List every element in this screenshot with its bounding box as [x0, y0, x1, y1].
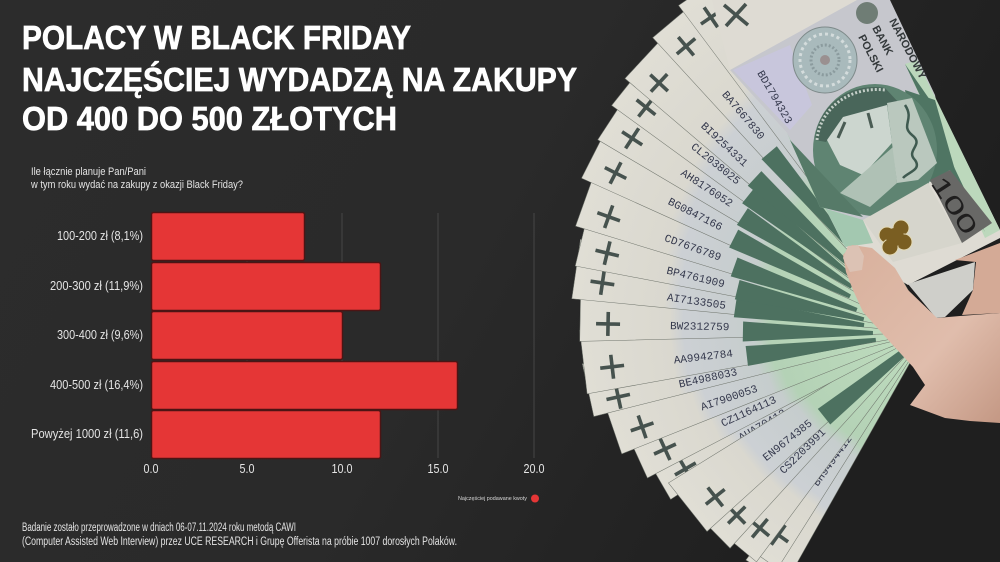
- banknote fan: BI9254331: [698, 121, 750, 170]
- lower green field: [787, 133, 873, 247]
- gold hologram: [879, 220, 912, 255]
- upper finger: [955, 243, 1000, 315]
- bank name: BANK: [869, 24, 895, 58]
- axis labels: 20.0: [524, 462, 545, 476]
- bars: [152, 212, 458, 458]
- survey question: Ile łącznie planuje Pan/Pani: [31, 166, 146, 178]
- title: [22, 19, 577, 137]
- bank name: NARODOWY: [886, 17, 929, 82]
- banknote fan: AH8176052: [678, 168, 734, 210]
- source note: [22, 522, 457, 548]
- banknote fan: BG0847166: [665, 197, 724, 234]
- category labels: 200-300 zł (11,9%): [50, 279, 143, 293]
- shoulder: [790, 140, 863, 217]
- banknote fan: CL2038025: [688, 142, 742, 188]
- banknote fan: CS2203991: [778, 427, 829, 477]
- palm and fingers: [843, 245, 1000, 423]
- serial number: BD1794323: [754, 69, 794, 126]
- periwinkle ornament: [733, 45, 812, 130]
- fingernail: [843, 245, 864, 272]
- source note: (Computer Assisted Web Interview) przez UCE RESEARCH i Grupę Offerista na próbie 1007 dorosłych Polaków.: [22, 536, 457, 548]
- banknote fan: AI7900053: [699, 384, 760, 414]
- ornament field: [730, 0, 950, 247]
- dark green field: [905, 64, 985, 232]
- crown: [887, 98, 937, 183]
- survey question: w tym roku wydać na zakupy z okazji Black Friday?: [30, 179, 243, 191]
- banknote fan: [572, 0, 1000, 562]
- legend ring: [817, 90, 885, 140]
- bank name: POLSKI: [855, 33, 885, 75]
- watermark panel: [863, 183, 962, 262]
- bank name: [855, 17, 929, 82]
- axis labels: [144, 462, 545, 476]
- eagle emblem: [856, 2, 878, 24]
- axis labels: 10.0: [332, 462, 353, 476]
- banknote fan: CD7676789: [662, 233, 722, 265]
- banknote fan: AUA70412: [737, 408, 789, 445]
- banknote fan: BP4761909: [665, 266, 726, 291]
- stack of banknotes in hand: [908, 262, 975, 318]
- face: [827, 105, 892, 175]
- banknote fan: BH9494412: [811, 434, 855, 489]
- rosette: [793, 27, 857, 93]
- axis labels: 5.0: [240, 462, 255, 476]
- denomination band: [930, 170, 992, 243]
- title: NAJCZĘŚCIEJ WYDADZĄ NA ZAKUPY: [22, 61, 577, 98]
- category labels: [31, 229, 143, 441]
- title: OD 400 DO 500 ZŁOTYCH: [22, 100, 397, 137]
- category labels: Powyżej 1000 zł (11,6): [31, 427, 143, 441]
- legend: Najczęściej podawane kwoty: [458, 496, 527, 502]
- survey question: [30, 166, 243, 191]
- axis labels: 0.0: [144, 462, 159, 476]
- banknote fan: BA7667830: [719, 90, 766, 143]
- bar chart: [31, 212, 545, 476]
- banknote fan: AI7133505: [666, 292, 727, 313]
- category labels: 100-200 zł (8,1%): [57, 229, 143, 243]
- banknote fan: EN9674385: [761, 418, 815, 464]
- hand: [843, 243, 1000, 423]
- banknote fan: AA9942784: [673, 349, 734, 367]
- source note: Badanie zostało przeprowadzone w dniach 06-07.11.2024 roku metodą CAWI: [22, 522, 296, 534]
- axis labels: 15.0: [428, 462, 449, 476]
- banknote fan: BW2312759: [670, 321, 730, 334]
- cream end of the note: [712, 0, 1000, 285]
- pale green edge stripe: [905, 60, 1000, 238]
- denomination numerals: 100: [925, 172, 982, 240]
- title: POLACY W BLACK FRIDAY: [22, 19, 411, 56]
- front banknote: [712, 0, 1000, 285]
- banknote fan: CZ1164113: [720, 395, 779, 431]
- category labels: 400-500 zł (16,4%): [50, 378, 143, 392]
- dark background of medallion: [815, 87, 900, 142]
- eye and nose: [838, 113, 872, 138]
- banknote fan: BE4988033: [678, 367, 739, 392]
- category labels: 300-400 zł (9,6%): [57, 328, 143, 342]
- portrait medallion: [790, 84, 937, 217]
- cross mark: [724, 4, 748, 26]
- legend: [458, 494, 539, 502]
- beard: [840, 147, 897, 207]
